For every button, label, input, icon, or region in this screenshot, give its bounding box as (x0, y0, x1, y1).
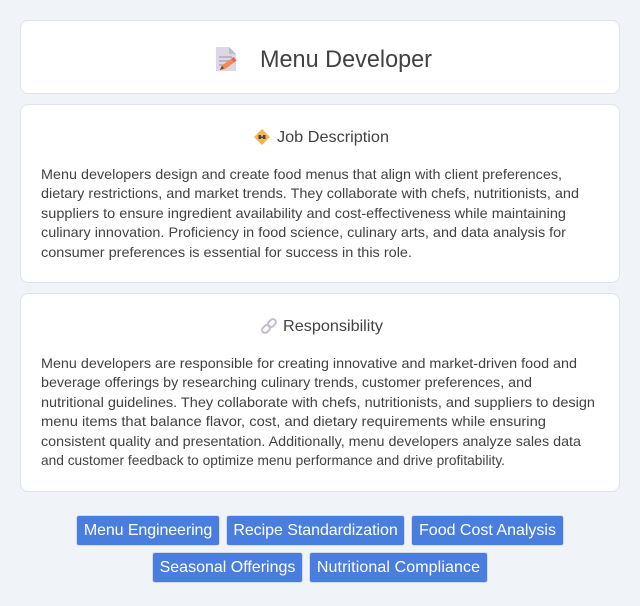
tag: food cost analysis (412, 516, 563, 545)
text block: job description: suppliers to ensure ingredient availability and cost-effectiveness while maintaining (41, 205, 566, 221)
icon: chain link (261, 318, 277, 334)
text block: job description: dietary restrictions, and market trends. They collaborate with chefs, nutritionists, and (41, 185, 579, 201)
tag: nutritional compliance: Nutritional Compliance (317, 559, 480, 576)
text block: responsibility: nutritional guidelines. They collaborate with chefs, nutritionists, and suppliers to design (41, 394, 595, 410)
heading: job description: Job Description (277, 129, 389, 146)
tag: nutritional compliance (310, 553, 487, 582)
text block: job description: Menu developers design and create food menus that align with client preferences, (41, 166, 562, 182)
text block: responsibility: menu items that balance flavor, cost, and dietary requirements while ensuring (41, 413, 546, 429)
title: Menu Developer (260, 46, 432, 73)
tag: food cost analysis: Food Cost Analysis (419, 522, 556, 539)
text block: job description (41, 166, 579, 260)
panel: job description (20, 104, 620, 283)
text block: responsibility: Menu developers are responsible for creating innovative and market-driven food and (41, 355, 577, 371)
tag: recipe standardization: Recipe Standardization (233, 522, 398, 539)
tag: seasonal offerings (153, 553, 302, 582)
panel: title (20, 20, 620, 94)
text block: responsibility (41, 355, 595, 468)
text block: responsibility: consistent quality and presentation. Additionally, menu developers analyze sales data (41, 433, 581, 449)
tag: menu engineering: Menu Engineering (84, 522, 212, 539)
text block: job description: culinary innovation. Proficiency in food science, culinary arts, and data analysis for (41, 224, 566, 240)
text block: responsibility: beverage offerings by researching culinary trends, customer preferences, and (41, 374, 532, 390)
heading: responsibility: Responsibility (283, 318, 383, 335)
tag: recipe standardization (227, 516, 404, 545)
text block: responsibility: and customer feedback to optimize menu performance and drive profitability. (41, 452, 505, 468)
text block: job description: consumer preferences is essential for success in this role. (41, 244, 412, 260)
panel: responsibility (20, 293, 620, 492)
tag: menu engineering (77, 516, 219, 545)
tag: seasonal offerings: Seasonal Offerings (160, 559, 295, 576)
icon: diamond sign (254, 129, 270, 145)
icon: document with pencil (216, 47, 236, 71)
